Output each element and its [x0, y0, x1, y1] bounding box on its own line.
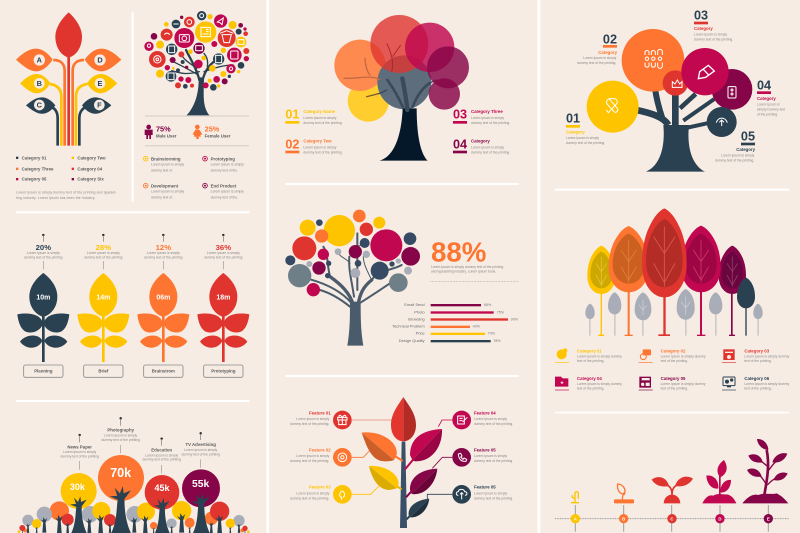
callout: news paper [61, 434, 99, 470]
list: process steps: Development [151, 183, 179, 188]
features left: dummy text of the printing. [290, 459, 329, 463]
callout: news paper: News Paper [67, 444, 92, 449]
item: category 02: 02 [285, 138, 299, 152]
callout: photography: Lorem Ipsum is simply [104, 434, 138, 438]
step C: two leaf sprout: C [670, 516, 674, 521]
chart: prototyping plant: Prototyping [211, 369, 236, 374]
item: category 02 [285, 138, 343, 155]
features right: dummy text of the printing. [474, 496, 513, 500]
item: category 05: dummy text of the printing. [715, 159, 754, 163]
chart: A to F leaf stems: C [37, 101, 43, 110]
stat: male user [145, 125, 177, 139]
chart: brainstorm plant: 12% [156, 243, 171, 252]
chart: forest of circles: 55k [192, 479, 210, 490]
item: category 05 [715, 129, 756, 163]
chart: forest of circles: 70k [110, 466, 132, 480]
chart: brainstorm plant: dummy text of the printing [144, 255, 183, 259]
features left: Feature 02 [309, 447, 331, 452]
panel: leaf options and icon tree [16, 11, 249, 213]
item: category three [453, 108, 510, 125]
list: process steps: dummy text of the. [211, 195, 238, 199]
list: process steps: Lorem Ipsum is simply [211, 190, 244, 194]
chart: planning plant [17, 234, 69, 377]
list: process steps: Brainstorming [151, 156, 181, 161]
bar chart: quality metrics: Design Quality [399, 338, 425, 343]
bar chart: quality metrics: 75% [497, 310, 505, 314]
chart: brief plant [77, 234, 129, 377]
chart: bubble tree [285, 210, 420, 346]
chart: A to F leaf stems: D [97, 56, 103, 65]
features left: Lorem Ipsum is simply [296, 454, 330, 458]
bar chart: quality metrics: 65% [484, 303, 492, 307]
features left: Feature 03 [309, 485, 331, 490]
divider [285, 375, 519, 377]
legend: categories: Category Six [77, 177, 104, 182]
chart: brainstorm plant [137, 234, 189, 377]
features left: dummy text of the printing. [290, 422, 329, 426]
item: category 01 [285, 108, 343, 125]
callout: tv advertising: dummy text of the printing [182, 452, 220, 456]
callout: photography [102, 417, 140, 453]
chart: leaf trees [585, 208, 763, 336]
chart: A to F leaf stems: F [97, 101, 102, 110]
text block: lorem paragraph: ting industry. Lorem Ipsum has been the industry. [16, 196, 95, 200]
item: category 02: dummy text of the printing. [577, 61, 616, 65]
features left: Lorem Ipsum is simply [296, 491, 330, 495]
bar chart: quality metrics [392, 302, 519, 343]
item: category 06: text of the printing. [744, 386, 772, 390]
item: category 05: Lorem Ipsum is simply dummy [661, 382, 706, 386]
step E: grown plant [742, 439, 788, 523]
panel gutters [266, 0, 540, 533]
bar chart: quality metrics: Email Send [404, 302, 425, 307]
item: category 02: Category [598, 50, 618, 55]
item: category 04: Lorem Ipsum is [757, 102, 780, 106]
legend: categories: Category 05 [22, 177, 47, 182]
chart: prototyping plant: 18m [216, 295, 230, 302]
divider [16, 211, 249, 213]
item: category 01: Category [566, 129, 585, 134]
features left: Lorem Ipsum is simply [296, 417, 330, 421]
divider [285, 183, 519, 185]
item: category 03: Lorem Ipsum is simply [694, 33, 727, 37]
divider [16, 400, 249, 402]
item: category 01 [555, 348, 622, 363]
item: category 04: simply Dummy text [757, 107, 785, 111]
chart: planning plant: dummy text of the printing [24, 255, 63, 259]
panel: big circle tree [555, 9, 789, 191]
divider [145, 115, 249, 117]
item: category 04: 04 [453, 138, 467, 152]
connectors [352, 420, 452, 499]
text block: lorem paragraph [16, 190, 117, 200]
stat: male user: 75% [156, 125, 171, 134]
item: category 06: Lorem Ipsum is simply dummy [744, 382, 790, 386]
chart: brief plant: 28% [96, 243, 111, 252]
features right: Lorem Ipsum is simply [474, 417, 507, 421]
item: category 04 [757, 78, 785, 117]
item: category 01 [566, 112, 605, 145]
list: process steps: End Product [211, 183, 237, 188]
item: category 01: Category Name [303, 109, 336, 114]
item: category 04: of the printing. [757, 113, 778, 117]
chart: overlapping circle tree [334, 15, 469, 161]
features right: Lorem Ipsum is simply [474, 454, 507, 458]
item: category 02: dummy text of the printing. [303, 151, 343, 155]
item: category 02 [639, 349, 706, 363]
item: category 01: Lorem Ipsum is simply [566, 136, 599, 140]
item: category 04: Lorem Ipsum is simply [471, 146, 504, 150]
chart: brainstorm plant: Lorem Ipsum is simply [147, 251, 180, 255]
chart: forest of circles [18, 455, 250, 533]
chart: forest of circles: 45k [154, 483, 169, 493]
chart: A to F leaf stems: A [37, 56, 43, 65]
item: category 02: 02 [603, 32, 617, 46]
legend: categories: Category 01 [22, 155, 47, 160]
callout: photography: dummy text of the printing [102, 438, 140, 442]
step C: two leaf sprout [652, 477, 693, 523]
list: process steps: Lorem Ipsum is simply [151, 163, 184, 167]
item: category 04 [555, 376, 622, 390]
item: category 01: Lorem Ipsum is simply [303, 116, 337, 120]
text block: lorem paragraph: Lorem Ipsum is simply dummy text of the printing and typeset- [16, 190, 117, 194]
item: category 04: 04 [757, 78, 771, 92]
item: category 01: dummy text of the printing. [303, 121, 343, 125]
chart: brainstorm plant: Brainstrom [152, 369, 175, 374]
callout: tv advertising [182, 432, 220, 468]
item: category 01: Category 01 [577, 349, 602, 354]
item: category 05 [639, 376, 706, 390]
divider column [132, 12, 134, 202]
text block: lorem: Lorem Ipsum is simply dummy text of the printing [431, 265, 503, 269]
chart: A to F leaf stems: E [98, 79, 103, 88]
legend: categories [16, 155, 106, 182]
stat: female user: 25% [205, 125, 220, 134]
features right: dummy text of the printing. [474, 459, 513, 463]
big stat: 88 percent: 88% [431, 237, 486, 268]
chart: brief plant: Brief [98, 369, 109, 374]
chart: A to F leaf stems [16, 12, 121, 146]
item: category 05: 05 [741, 129, 755, 143]
step E: grown plant: E [767, 516, 770, 521]
item: category 01: text of the printing. [577, 359, 604, 363]
item: category three: dummy text of the printing. [471, 121, 510, 125]
panel: leaf forest and categories [555, 208, 790, 390]
features right: Lorem Ipsum is simply [474, 491, 507, 495]
callout: education: dummy text of the printing [143, 458, 181, 462]
list: process steps: Prototyping [211, 156, 235, 161]
callout: news paper: Lorem Ipsum is simply [63, 450, 97, 454]
item: category 04: Category [757, 96, 776, 101]
step A: sprout: A [574, 516, 578, 521]
panel: 88 percent tree and bars [285, 210, 519, 377]
item: category 04: Lorem Ipsum is simply dummy [577, 382, 622, 386]
legend: categories: Category Two [77, 155, 106, 160]
list: process steps: Lorem Ipsum is simply [211, 163, 244, 167]
chart: brief plant: Lorem Ipsum is simply [87, 251, 120, 255]
dotted separator [430, 281, 519, 283]
item: category 03 [722, 349, 790, 363]
divider [555, 189, 789, 191]
divider [145, 145, 249, 146]
item: category 05: Category 05 [661, 376, 686, 381]
item: category 03: dummy text of the printing. [694, 38, 733, 42]
item: category 01: Lorem Ipsum is simply dummy [577, 355, 622, 359]
item: category 02: Category Two [303, 139, 332, 144]
item: category 03: text of the printing. [744, 359, 772, 363]
chart: planning plant: Lorem Ipsum is simply [27, 251, 60, 255]
step B: seedling [614, 484, 634, 523]
callout: tv advertising: TV Advertising [185, 442, 216, 447]
item: category 03: Category [694, 26, 713, 31]
list: process steps: dummy text of. [151, 195, 173, 199]
item: category 05: Lorem Ipsum is simply [721, 154, 755, 158]
timeline axis [555, 505, 789, 532]
chart: tree with five circles [587, 29, 752, 172]
features left: Feature 01 [309, 410, 331, 415]
features right [474, 410, 513, 500]
features right: Feature 05 [474, 447, 496, 452]
bar chart: quality metrics: 90% [511, 318, 519, 322]
callout: photography: Photography [107, 428, 135, 433]
item: category 01: 01 [285, 108, 299, 122]
bar chart: quality metrics: Photo [414, 309, 425, 314]
chart: prototyping plant: Lorem Ipsum is simply [207, 251, 240, 255]
item: category 02: Category 02 [661, 349, 686, 354]
panel: plant growth timeline [555, 412, 789, 532]
chart: icon tree [144, 11, 249, 116]
chart: planning plant: 20% [36, 243, 51, 252]
step A: sprout [571, 492, 580, 523]
item: category three: Lorem Ipsum is simply [471, 116, 504, 120]
chart: brief plant: 14m [96, 295, 110, 302]
callout: education: Lorem Ipsum is simply [145, 453, 179, 457]
stat: female user: Female User [205, 133, 231, 138]
callout: tv advertising: Lorem Ipsum is simply [184, 448, 218, 452]
legend: categories: Category Three [22, 166, 54, 171]
features left [290, 410, 331, 500]
item: category 02 [577, 32, 618, 65]
chart: planning plant: 10m [36, 295, 50, 302]
item: category 05: Category [736, 147, 756, 152]
panel: translucent circle tree [285, 15, 519, 185]
bar chart: quality metrics: Technical Problem [392, 324, 425, 329]
item: category 02: Lorem Ipsum is simply [303, 146, 337, 150]
chart: A to F leaf stems: B [37, 79, 42, 88]
list: process steps: dummy text of. [151, 168, 173, 172]
panel: feature leaf branch [290, 397, 513, 528]
step D: young plant [702, 460, 736, 523]
legend: categories: Category 04 [77, 166, 103, 171]
item: category 06 [722, 376, 790, 390]
callout: news paper: dummy text of the printing [61, 454, 99, 458]
item: category 02: Lorem Ipsum is simply [583, 56, 617, 60]
step B: seedling: B [622, 516, 625, 521]
item: category 04: dummy text of the printing. [471, 151, 510, 155]
panel: four leaf plants and forest [16, 234, 250, 533]
item: category 01: 01 [566, 112, 580, 126]
item: category 02: Lorem Ipsum is simply dummy [661, 355, 706, 359]
item: category 01: dummy text of the printing. [566, 141, 605, 145]
chart: prototyping plant: 36% [216, 243, 231, 252]
bar chart: quality metrics: Price [416, 331, 425, 336]
features right: Feature 04 [474, 410, 496, 415]
item: category 03: Category 03 [744, 349, 770, 354]
chart: planning plant: Planning [34, 369, 53, 374]
item: category three: 03 [453, 108, 467, 122]
icon circles [333, 411, 471, 504]
bar chart: quality metrics: 70% [488, 332, 496, 336]
list: process steps [143, 156, 244, 199]
item: category 03: Lorem Ipsum is simply dummy [744, 355, 790, 359]
callout: education [143, 437, 181, 473]
item: category 04 [453, 138, 510, 155]
item: category 04: text of the printing. [577, 386, 604, 390]
chart: brief plant: dummy text of the printing [84, 255, 123, 259]
chart: brainstorm plant: 06m [156, 295, 170, 302]
list: process steps: dummy text of the. [211, 168, 238, 172]
chart: prototyping plant: dummy text of the printing [204, 255, 243, 259]
bar chart: quality metrics: 78% [493, 339, 501, 343]
item: category 03: 03 [694, 9, 708, 23]
item: category 04: Category 04 [577, 376, 602, 381]
chart: prototyping plant [197, 234, 249, 377]
stat: female user [193, 125, 231, 139]
callout: education: Education [151, 448, 172, 453]
list: process steps: Lorem Ipsum is simply [151, 190, 184, 194]
features right: dummy text of the printing. [474, 422, 513, 426]
bar chart: quality metrics: 40% [473, 325, 481, 329]
text block: lorem [431, 265, 503, 274]
features left: dummy text of the printing. [290, 496, 329, 500]
step D: young plant: D [718, 516, 722, 521]
item: category three: Category Three [471, 109, 503, 114]
item: category 04: Category [471, 139, 490, 144]
divider [555, 412, 789, 413]
text block: lorem: and typesetting industry. Lorem Ipsum book. [431, 270, 496, 274]
chart: branch with leaves [362, 397, 442, 528]
item: category 03 [694, 9, 733, 42]
item: category 06: Category 06 [744, 376, 770, 381]
item: category 05: text of the printing. [661, 386, 688, 390]
features right: Feature 05 [474, 485, 496, 490]
chart: forest of circles: 30k [70, 482, 85, 492]
stat: male user: Male User [156, 133, 177, 138]
bar chart: quality metrics: Browsing [408, 316, 425, 321]
item: category 02: text of the printing. [661, 359, 688, 363]
